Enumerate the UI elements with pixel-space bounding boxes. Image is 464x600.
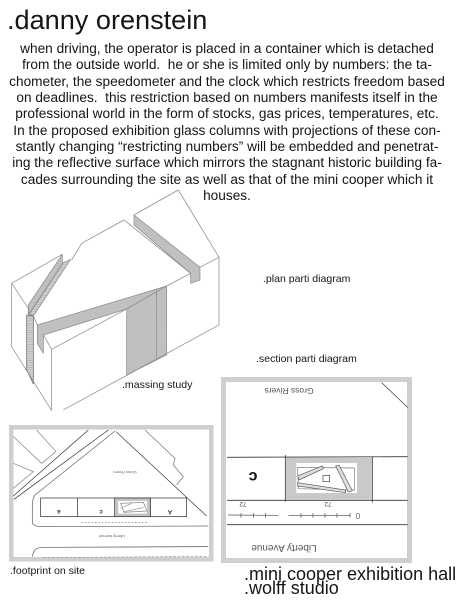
text block: project description: ing the reflective surface which mirrors the stagnant historic building fa- <box>12 155 442 170</box>
panel: footprint on site: c <box>99 508 103 514</box>
text block: project description: houses. <box>203 188 251 203</box>
title: .danny orenstein <box>7 4 207 35</box>
panel: section parti site plan: c <box>248 468 257 485</box>
panel: footprint on site: Liberty Avenue <box>98 534 125 539</box>
label: section parti diagram: .section parti diagram <box>256 353 357 365</box>
panel: section parti site plan: 0 <box>355 511 360 520</box>
text block: project description <box>9 41 445 203</box>
panel: section parti site plan: Gross Rivers <box>264 386 314 396</box>
label: footprint on site: .footprint on site <box>10 565 85 577</box>
text block: project description: from the outside world. he or she is limited only by numbers: the ta- <box>22 57 432 72</box>
text block: project description: when driving, the operator is placed in a container which is detached <box>20 41 434 56</box>
panel: footprint on site <box>9 425 214 562</box>
label: massing study: .massing study <box>122 379 192 391</box>
title: mini cooper exhibition hall: .mini cooper exhibition hall <box>244 564 456 584</box>
panel: footprint on site: Gross Rivers <box>113 470 137 475</box>
panel: section parti site plan: 72 <box>239 500 247 507</box>
text block: project description: chometer, the speedometer and the clock which restricts freedom based <box>9 74 445 89</box>
text block: project description: on deadlines. this restriction based on numbers manifests itself in the <box>16 90 438 105</box>
title: wolff studio: .wolff studio <box>244 578 339 598</box>
text block: project description: professional world in the form of stocks, gas prices, temperatures, etc. <box>15 106 439 121</box>
panel: section parti site plan <box>221 377 412 563</box>
panel: footprint on site: A <box>167 508 172 514</box>
panel: footprint on site: a <box>57 508 61 514</box>
text block: project description: stantly changing “restricting numbers” will be embedded and penetrat- <box>16 139 438 154</box>
panel: section parti site plan: Liberty Avenue <box>251 542 317 553</box>
label: plan parti diagram: .plan parti diagram <box>263 273 350 285</box>
panel: section parti site plan: 72 <box>324 500 332 507</box>
text block: project description: cades surrounding the site as well as that of the mini cooper which it <box>21 172 433 187</box>
text block: project description: In the proposed exhibition glass columns with projections of these con- <box>13 123 441 138</box>
